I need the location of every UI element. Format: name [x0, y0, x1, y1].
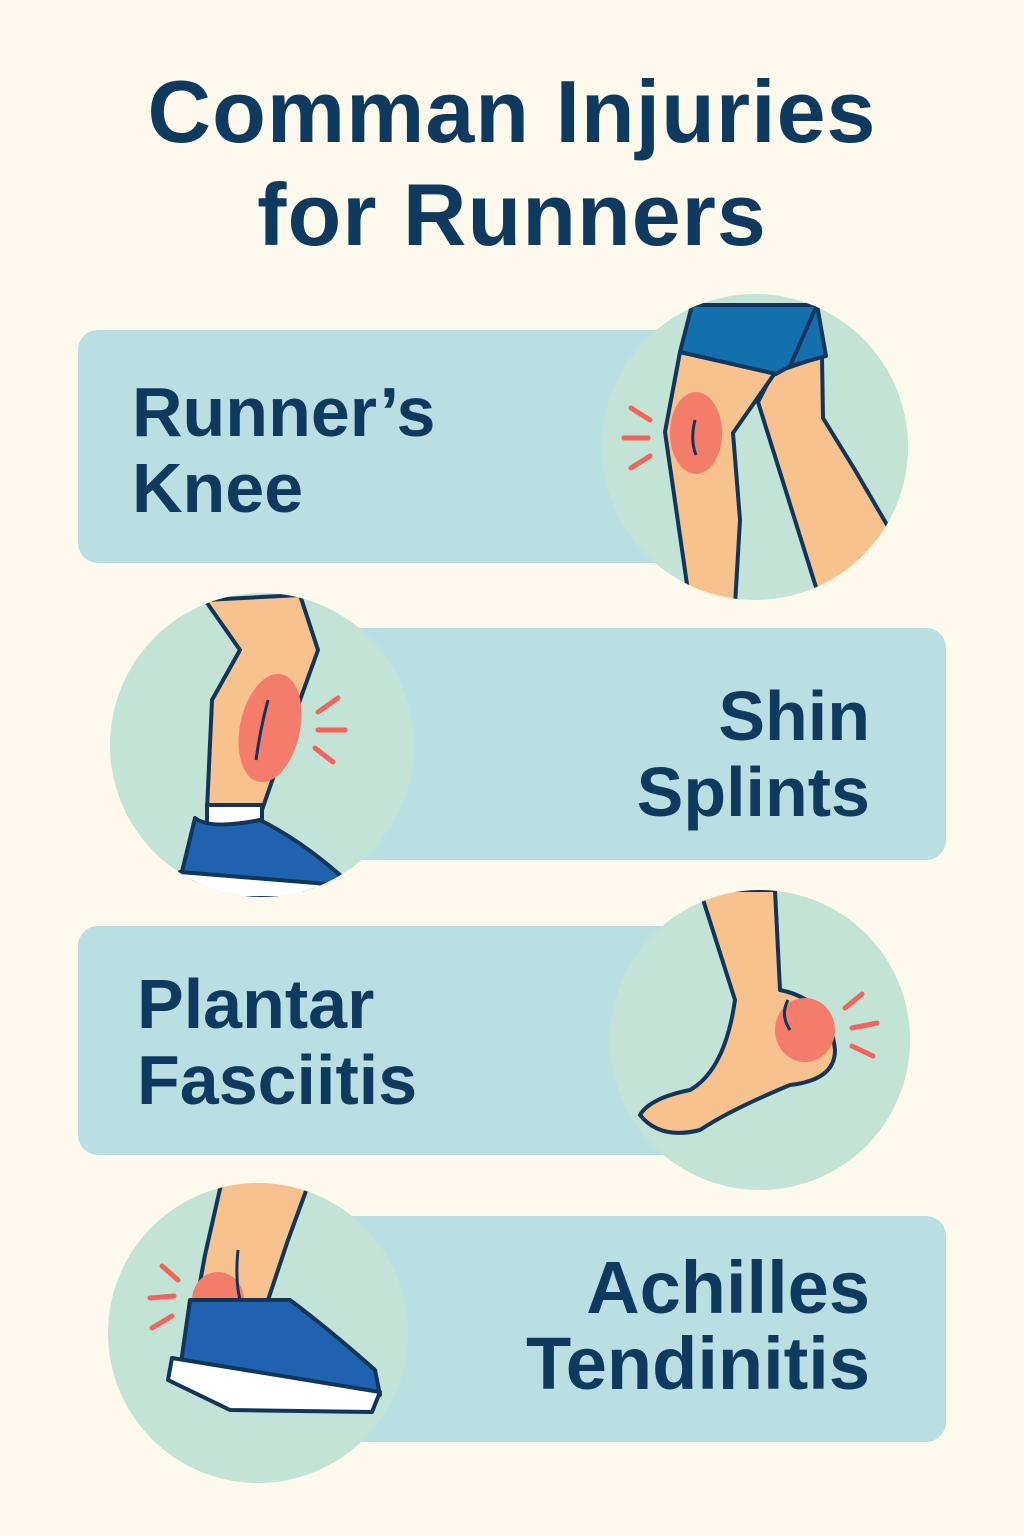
label: shin splints: Shin: [718, 677, 870, 755]
label: plantar fasciitis: Plantar: [137, 965, 374, 1043]
illustrations: [108, 294, 910, 1483]
icon: foot: [610, 890, 910, 1190]
label: plantar fasciitis: Fasciitis: [137, 1041, 417, 1119]
label: achilles tendinitis: Achilles: [586, 1246, 870, 1329]
label: runner's knee: Knee: [132, 449, 303, 527]
panel: achilles tendinitis: [320, 1216, 946, 1442]
title: for Runners: [257, 165, 767, 264]
icon: knee: [602, 294, 908, 605]
label: shin splints: Splints: [637, 753, 870, 831]
label: shin splints: [637, 677, 870, 831]
panel: runner's knee: [78, 330, 718, 563]
title: Comman Injuries: [148, 62, 876, 161]
icon: shin: [110, 593, 414, 898]
label: runner's knee: [132, 373, 435, 527]
label: runner's knee: Runner’s: [132, 373, 435, 451]
panel: shin splints: [320, 628, 946, 860]
panel: plantar fasciitis: [78, 926, 718, 1155]
icon: achilles: [108, 1180, 408, 1483]
label: plantar fasciitis: [137, 965, 417, 1119]
label: achilles tendinitis: [526, 1246, 870, 1405]
title: [148, 62, 876, 264]
label: achilles tendinitis: Tendinitis: [526, 1322, 870, 1405]
